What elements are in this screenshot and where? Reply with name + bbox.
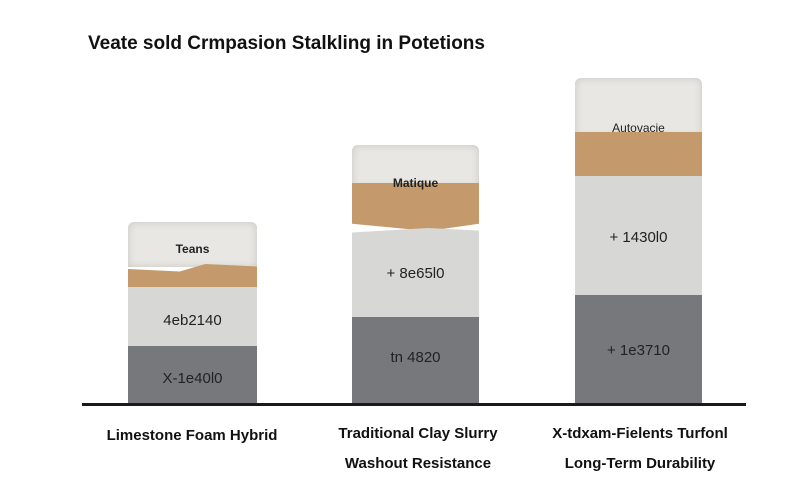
value: + 8e65l0 [386, 265, 444, 282]
sub label 3: Long-Term Durability [565, 455, 715, 472]
bar: Limestone Foam Hybrid [128, 222, 257, 403]
value: tn 4820 [390, 349, 441, 366]
x label 3: X-tdxam-Fielents Turfonl [552, 425, 728, 442]
bar: Traditional Clay Slurry [352, 145, 479, 403]
value: 4eb2140 [163, 312, 222, 329]
bar: third [575, 78, 702, 403]
label: Teans: Teans [176, 242, 209, 256]
baseline [82, 403, 746, 406]
sub label 2: Washout Resistance [345, 455, 491, 472]
value: X-1e40l0 [162, 370, 223, 387]
x label 1: Limestone Foam Hybrid [107, 427, 277, 444]
value: + 1430l0 [610, 229, 667, 246]
x label 2: Traditional Clay Slurry [338, 425, 498, 442]
value: + 1e3710 [607, 342, 670, 359]
label: Autovacie: Autovacie [612, 121, 665, 135]
label: Matique: Matique [393, 176, 438, 190]
title: Veate sold Crmpasion Stalkling in Potetions [88, 33, 485, 54]
